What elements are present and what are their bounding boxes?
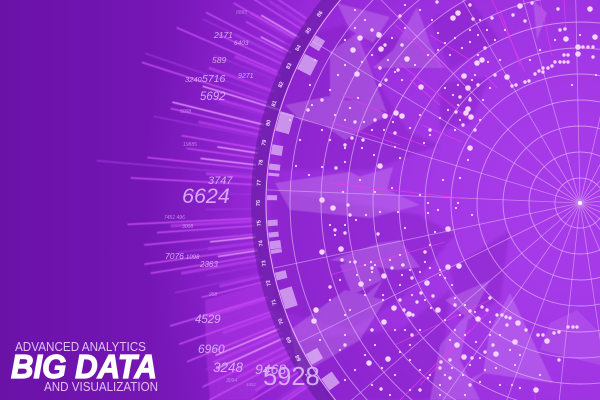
small dots [290,5,596,395]
dark polygons [270,0,510,400]
floating data numbers: 7076 [165,251,184,261]
medium burst lines [128,0,310,400]
radial burst lines [97,0,310,400]
ring tick numbers: 74 [258,239,265,247]
floating data numbers: 6960 [198,342,225,356]
floating data numbers: 5716 [202,73,226,85]
floating data numbers: 6403 [234,40,249,47]
ring tick numbers: 77 [256,180,263,186]
floating data numbers: 6624 [182,184,230,208]
floating data numbers: 589 [212,55,226,65]
title block [11,339,158,394]
floating data numbers: 3094 [226,378,237,384]
ring tick numbers: 70 [278,317,285,325]
center point [578,201,582,205]
floating data numbers: 3747 [208,175,233,187]
medium dots [308,2,593,390]
large dots [314,6,595,390]
floating data numbers: 8885 [236,10,247,16]
floating data numbers: 4529 [195,314,221,326]
ring tick numbers: 78 [258,159,265,166]
ring tick numbers: 72 [265,279,273,287]
floating data numbers: 5928 [263,363,320,391]
dim burst lines [97,0,305,400]
bright burst lines [172,15,299,369]
floating data numbers: 2171 [213,30,233,40]
floating data numbers: 4451 [246,382,257,387]
floating data numbers: 5692 [200,91,226,103]
floating data numbers: 1098 [186,255,200,261]
scatter dots [290,2,596,395]
magenta wash lower burst [205,275,300,400]
floating data numbers: 3008 [182,224,193,230]
concentric circles [290,0,600,400]
ring tick numbers: 82 [278,81,285,89]
ring tick numbers: 80 [265,119,273,127]
ring tick numbers: 73 [261,260,268,267]
magenta streaks inside radar [330,0,566,400]
faint light polygon bottom right [540,310,600,365]
ring tick numbers: 71 [271,298,279,306]
floating data numbers: 3248 [213,360,244,375]
ring tick numbers: 68 [295,354,303,362]
ring tick numbers: 67 [305,371,313,379]
floating data numbers: 9271 [238,73,254,80]
floating data numbers: 19885 [183,142,197,148]
ring line [266,0,600,400]
floating data numbers: 958 [209,292,218,298]
radar disc [266,0,600,400]
floating data numbers: 5098 [180,109,191,115]
ring tick numbers: 86 [316,10,325,19]
floating data numbers: 3240 [185,75,203,84]
subtitle top: ADVANCED ANALYTICS [15,339,146,354]
subtitle bottom: AND VISUALIZATION [44,380,158,394]
outer ring [256,0,600,400]
ring tick numbers: 79 [261,139,268,146]
ring tick numbers: 69 [286,336,294,344]
ring tick numbers [256,10,325,379]
wide magenta burst lines [171,1,309,400]
floating data numbers: 9468 [255,361,286,377]
floating data numbers [164,10,320,391]
radial spokes [267,0,600,400]
ring tick numbers: 75 [256,220,263,226]
ring tick numbers: 81 [271,100,279,108]
ring tick numbers: 83 [286,62,294,70]
ring tick numbers: 76 [256,200,262,206]
ring tick numbers: 85 [305,27,313,35]
ring tick numbers: 84 [295,43,303,52]
ring data bars [267,35,340,390]
main title: BIG DATA [11,348,157,385]
floating data numbers: 2363 [199,260,218,269]
translucent light polygons [275,0,553,400]
floating data numbers: 7451 496 [164,215,185,221]
ring band [258,0,600,400]
